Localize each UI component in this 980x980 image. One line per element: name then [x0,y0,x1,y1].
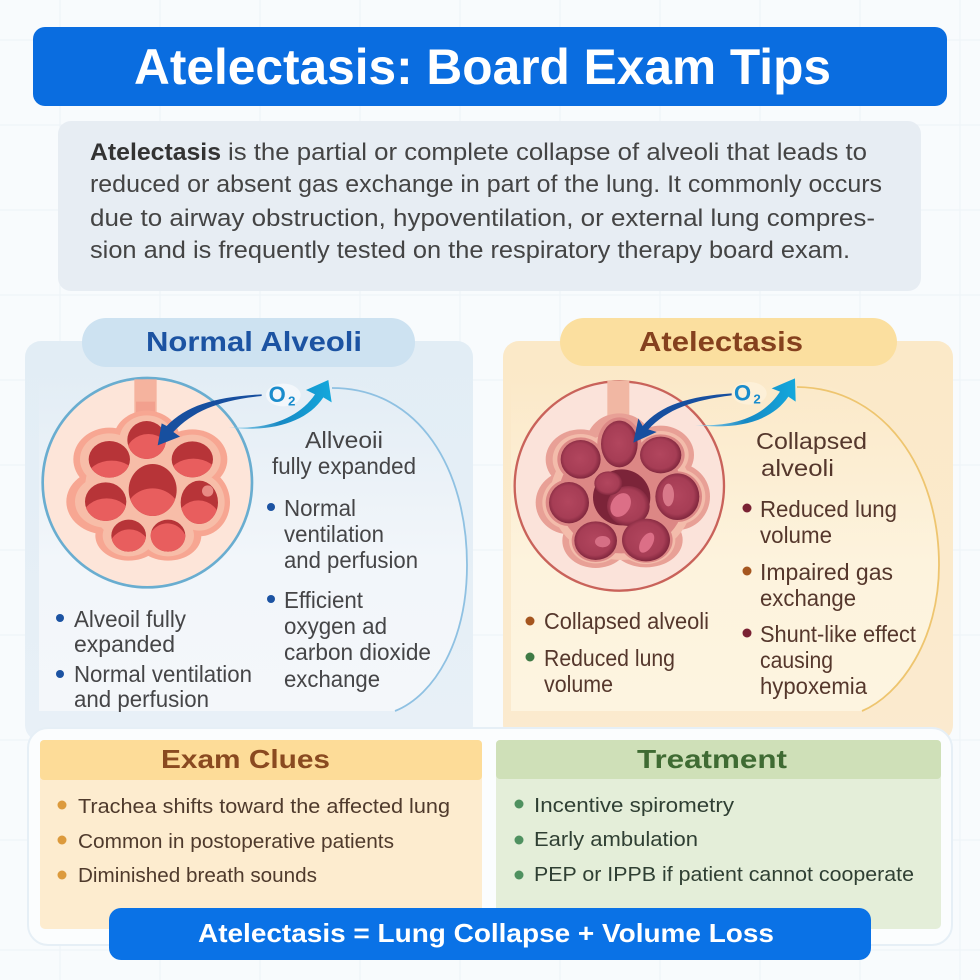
inner speech bubble [39,380,467,711]
callout text: collapsed alveoli: Collapsed [756,428,867,454]
right bullet list: normal: ventilation [284,521,384,547]
panel: normal alveoli [25,318,473,741]
label: O2: 2 [288,393,295,408]
right bullet list: atelectasis: Reduced lung [760,496,897,522]
right bullet list: normal [267,495,431,692]
right bullet list: normal: exchange [284,666,380,692]
heading pill: atelectasis [560,318,897,366]
label: O2: O [269,382,286,407]
bubble outline [797,387,939,711]
left bullet list: atelectasis: Reduced lung [544,645,675,671]
panel: exam clues: Common in postoperative patients [78,830,394,853]
heading pill: atelectasis: Atelectasis [639,326,803,357]
arrow: oxygen in [158,394,262,445]
illustration: expanded alveoli [43,378,332,587]
left bullet list: normal: expanded [74,631,175,657]
heading pill: normal alveoli [82,318,415,367]
label: O2: O [734,380,751,405]
panel: exam clues: Exam Clues [161,744,330,774]
heading pill: normal alveoli: Normal Alveoli [146,326,362,357]
intro text block: reduced or absent gas exchange in part of the lung. It commonly occurs [90,171,882,198]
callout text: alveoli expanded: Allveoii [305,427,383,453]
summary banner: Atelectasis = Lung Collapse + Volume Loss [198,918,774,948]
right bullet list: normal: carbon dioxide [284,639,431,665]
panel: exam clues: Diminished breath sounds [78,864,317,887]
callout text: alveoli expanded: fully expanded [272,453,416,479]
right bullet list: atelectasis: Shunt-like effect [760,621,917,647]
right bullet list: atelectasis [742,496,917,699]
left bullet list: atelectasis: Collapsed alveoli [544,608,709,634]
right bullet list: atelectasis: volume [760,522,832,548]
left bullet list: atelectasis: volume [544,671,613,697]
label: O2: 2 [753,392,761,407]
arrow: oxygen out [695,378,796,426]
right bullet list: normal: oxygen ad [284,613,387,639]
panel: treatment: Incentive spirometry [534,794,735,817]
right bullet list: atelectasis: causing [760,647,833,673]
intro text block: due to airway obstruction, hypoventilation, or external lung compres- [90,205,875,232]
panel: treatment: Early ambulation [534,828,698,851]
left bullet list: normal: Alveoil fully [74,606,186,632]
panel: exam clues [40,740,482,929]
intro text block: is the partial or complete collapse of alveoli that leads to [228,139,867,166]
arrow: oxygen in [633,393,732,443]
left bullet list: normal [56,606,252,712]
arrow: oxygen out [228,380,332,429]
intro text block [58,121,921,291]
panel: treatment [496,740,941,929]
title banner: Atelectasis: Board Exam Tips [134,39,831,95]
left bullet list: normal: and perfusion [74,686,209,712]
panel: treatment: Treatment [637,744,787,774]
panel: treatment: PEP or IPPB if patient cannot cooperate [534,863,914,886]
intro text block: Atelectasis [90,139,221,166]
right bullet list: normal: Efficient [284,587,364,613]
callout text: alveoli expanded [272,427,416,479]
right bullet list: atelectasis: hypoxemia [760,673,867,699]
right bullet list: normal: and perfusion [284,547,418,573]
label: O2 [732,380,767,407]
bubble outline [332,388,467,711]
title banner [33,27,947,106]
callout text: collapsed alveoli: alveoli [761,455,834,481]
left bullet list: atelectasis [526,608,709,697]
label: O2 [266,382,301,408]
right bullet list: normal: Normal [284,495,356,521]
panel: exam clues: Trachea shifts toward the affected lung [78,795,450,818]
right bullet list: atelectasis: Impaired gas [760,559,893,585]
callout text: collapsed alveoli [756,428,867,481]
panel: atelectasis [503,318,953,741]
inner speech bubble [511,380,939,711]
left bullet list: normal: Normal ventilation [74,661,252,687]
intro text block: sion and is frequently tested on the respiratory therapy board exam. [90,237,850,264]
summary banner [109,908,871,960]
right bullet list: atelectasis: exchange [760,585,856,611]
bottom container [28,728,952,945]
illustration: collapsed alveoli [515,378,796,591]
